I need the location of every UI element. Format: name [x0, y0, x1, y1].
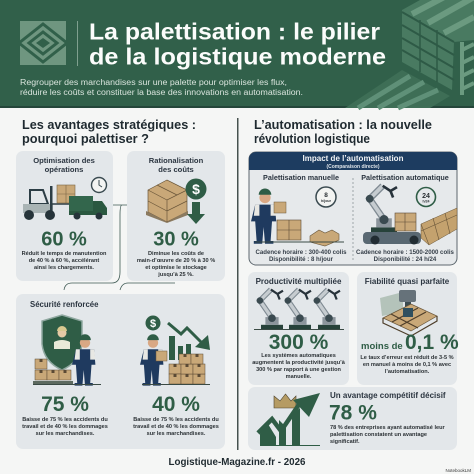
connector lines: [64, 205, 175, 290]
watermark: NotebookLM: [445, 468, 471, 473]
automatic column: Cadence horaire : 1500-2000 colis: [356, 249, 455, 256]
title: La palettisation : le pilier: [89, 18, 380, 44]
panel: impact de l'automatisation: (Comparaison directe): [326, 164, 380, 170]
manual column: [251, 173, 347, 263]
icon: worker, chart and boxes: $: [150, 318, 156, 330]
panel heading: des coûts: [158, 165, 194, 174]
title: [89, 18, 386, 70]
icon: crown over rising chart: [258, 393, 320, 446]
stat: 30 %: [153, 228, 199, 250]
stat: 75 %: 75 %: [41, 393, 89, 416]
panel: impact de l'automatisation: [249, 152, 457, 265]
description: en manuel à moins de 0,1 % avec: [363, 362, 451, 368]
stat: 40 %: 40 %: [152, 393, 200, 416]
description: main-d’œuvre de 20 % à 30 %: [137, 258, 215, 264]
title: de la logistique moderne: [89, 44, 386, 70]
manual column: 8: [324, 192, 328, 199]
icon: forklift and truck: [23, 178, 107, 220]
description: 78 % des entreprises ayant automatisé leur: [330, 425, 445, 431]
stat: 78 %: [329, 402, 377, 424]
automatic column: 24: [422, 193, 430, 200]
panel: avantage compétitif: [248, 387, 457, 450]
description: l’automatisation.: [385, 369, 430, 375]
panel: productivité multipliée: Productivité multipliée: [256, 277, 342, 286]
panel: productivité multipliée: [248, 272, 349, 385]
stat: [361, 331, 459, 354]
panel heading: Rationalisation: [149, 156, 203, 165]
stat: moins de: [361, 341, 403, 352]
left heading: [22, 117, 196, 146]
icon: scanner over pallet: [380, 290, 437, 336]
logo icon: [19, 21, 67, 65]
icon: boxes with dollar and down arrow: $: [192, 181, 200, 197]
description: manuelle.: [286, 374, 312, 380]
automatic column: h/24: [422, 200, 430, 204]
panel: fiabilité quasi parfaite: [357, 272, 459, 385]
automatic column: Disponibilité : 24 h/24: [374, 256, 437, 263]
description: sur les marchandises.: [36, 431, 95, 437]
subtitle: [20, 78, 303, 97]
description: sur les marchandises.: [147, 431, 206, 437]
description: Baisse de 75 % les accidents du: [22, 417, 108, 423]
description: Baisse de 75 % les accidents du: [133, 417, 219, 423]
manual column: h/jour: [321, 199, 332, 203]
panel: sécurité renforcée: [16, 294, 225, 449]
description: Les systèmes automatiques: [261, 353, 336, 359]
automatic column: Palettisation automatique: [361, 173, 449, 182]
right heading: L’automatisation : la nouvelle: [254, 117, 432, 132]
manual column: Palettisation manuelle: [263, 173, 339, 182]
icon: pallet stack decoration: [345, 0, 474, 108]
description: significatif.: [330, 439, 360, 445]
description: palettisation constatent un avantage: [330, 432, 427, 438]
header banner: [0, 0, 474, 108]
right heading: révolution logistique: [254, 131, 370, 146]
stat: 60 %: [41, 228, 87, 250]
left heading: pourquoi palettiser ?: [22, 131, 149, 146]
panel: fiabilité quasi parfaite: Fiabilité quasi parfaite: [365, 277, 450, 286]
panel header: [249, 152, 457, 170]
manual column: Disponibilité : 8 h/jour: [269, 256, 334, 263]
description: travail et de 40 % les dommages: [22, 424, 108, 430]
subtitle: réduire les coûts et constituer la base des innovations en automatisation.: [20, 88, 303, 97]
stat: 0,1 %: [405, 331, 459, 354]
stat: 300 %: [269, 331, 329, 354]
description: augmentent la productivité jusqu’à: [252, 360, 346, 366]
automatic column: [356, 173, 457, 263]
left heading: Les avantages stratégiques :: [22, 117, 196, 132]
description: de 40 % à 60 %, accélérant: [29, 258, 99, 264]
description: ainsi les chargements.: [34, 265, 94, 271]
description: et optimise le stockage: [145, 265, 207, 271]
column divider: [237, 118, 238, 450]
description: Diminue les coûts de: [148, 251, 204, 257]
icon: worker, chart and boxes: [140, 316, 210, 386]
description: travail et de 40 % les dommages: [133, 424, 219, 430]
description: Le taux d’erreur est réduit de 3-5 %: [360, 355, 454, 361]
description: 300 % par rapport à une gestion: [256, 367, 342, 373]
panel heading: Optimisation des: [33, 156, 95, 165]
description: jusqu’à 25 %.: [157, 272, 194, 278]
panel: avantage compétitif: Un avantage compétitif décisif: [330, 391, 446, 400]
panel heading: opérations: [45, 165, 83, 174]
panel: rationalisation des coûts: [127, 151, 225, 281]
panel: optimisation des opérations: [16, 151, 113, 281]
footer: Logistique-Magazine.fr - 2026: [168, 456, 306, 468]
right heading: [254, 117, 432, 146]
manual column: Cadence horaire : 300-400 colis: [255, 249, 347, 256]
panel heading: Sécurité renforcée: [30, 300, 99, 309]
panel: impact de l'automatisation: Impact de l’automatisation: [303, 154, 404, 163]
icon: shield with workers and boxes: [33, 315, 101, 386]
description: Réduit le temps de manutention: [22, 251, 106, 257]
subtitle: Regrouper des marchandises sur une palette pour optimiser les flux,: [20, 78, 287, 87]
icon: three robot arms: [254, 290, 344, 330]
